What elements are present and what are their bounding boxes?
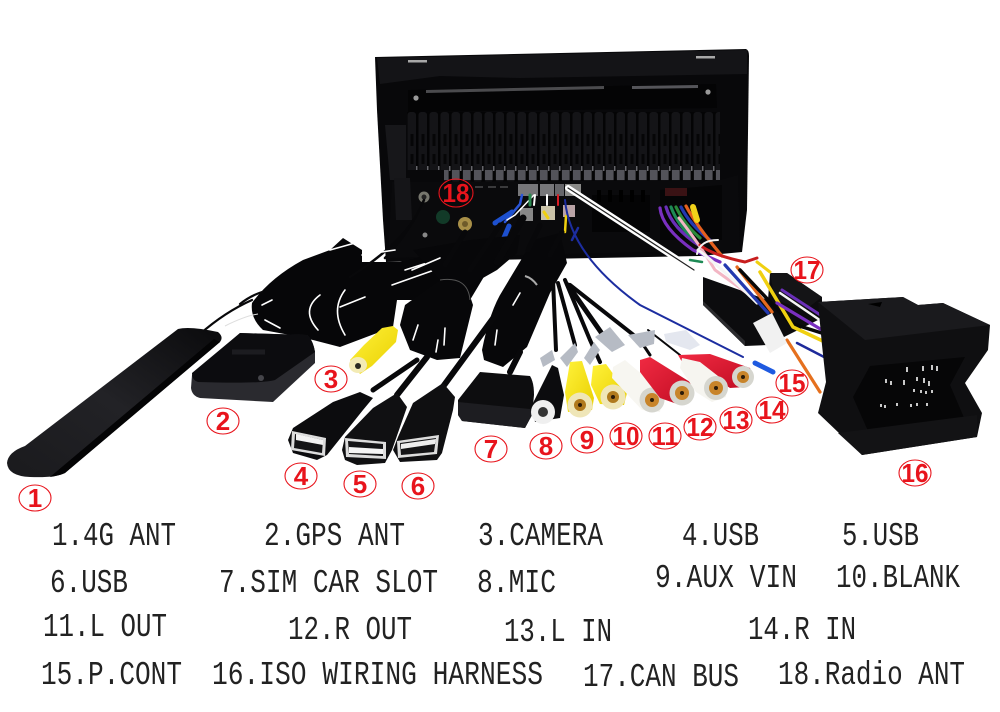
legend row 2: 8.MIC xyxy=(477,565,556,602)
callout 10: 10 xyxy=(612,421,640,451)
head unit rear panel xyxy=(375,49,749,262)
callout 14: 14 xyxy=(758,395,786,425)
callout 13: 13 xyxy=(722,405,750,435)
component 12: red RCA xyxy=(640,357,694,406)
callout 7: 7 xyxy=(484,434,498,464)
legend row 2: 6.USB xyxy=(50,565,128,602)
RCA cable tags xyxy=(540,327,700,367)
legend row 2 xyxy=(50,560,960,602)
wire label tag xyxy=(753,313,787,353)
legend row 2: 10.BLANK xyxy=(836,560,960,597)
callout 16: 16 xyxy=(902,458,928,488)
callout 6 xyxy=(402,471,434,501)
component 6: USB socket xyxy=(393,383,455,462)
component 3: camera RCA connector xyxy=(349,326,398,374)
USB branch cables xyxy=(373,313,520,395)
component 14: red RCA xyxy=(678,354,754,388)
component 9: yellow RCA xyxy=(565,361,594,418)
callout 5 xyxy=(344,469,376,499)
callout 3: 3 xyxy=(324,364,338,394)
legend row 3: 12.R OUT xyxy=(288,612,412,649)
callout 15: 15 xyxy=(778,368,806,398)
legend row 2: 7.SIM CAR SLOT xyxy=(219,565,438,602)
double white lead xyxy=(568,188,694,270)
callout 11: 11 xyxy=(652,421,678,451)
component 13: white RCA xyxy=(680,358,728,402)
callout 12: 12 xyxy=(686,412,714,442)
callout 9: 9 xyxy=(580,425,594,455)
component 4: USB socket xyxy=(288,392,373,460)
legend row 4: 16.ISO WIRING HARNESS xyxy=(212,657,543,694)
right RCA cable coil xyxy=(470,225,567,367)
component 5: USB socket xyxy=(342,393,407,465)
left antenna coil xyxy=(200,200,497,352)
component 8: mic socket xyxy=(531,365,564,424)
colour lead wires at connector xyxy=(505,195,743,357)
legend row 3: 14.R IN xyxy=(748,612,856,649)
callout 6: 6 xyxy=(411,471,425,501)
component 1: 4G antenna xyxy=(7,328,222,477)
callout 3 xyxy=(315,364,347,394)
callout 2 xyxy=(207,406,239,436)
cable highlights xyxy=(262,243,440,352)
callout 18: 18 xyxy=(442,178,470,208)
callout 8 xyxy=(530,431,562,461)
callout 4 xyxy=(285,461,317,491)
legend row 3 xyxy=(43,609,856,651)
legend row 1 xyxy=(52,518,919,555)
legend row 1: 4.USB xyxy=(682,518,759,555)
component 16: ISO wiring harness xyxy=(818,297,990,455)
legend row 1: 3.CAMERA xyxy=(478,518,603,555)
legend row 4: 15.P.CONT xyxy=(41,657,182,694)
legend row 1: 2.GPS ANT xyxy=(264,518,405,555)
callout 1: 1 xyxy=(28,483,42,513)
callout 1 xyxy=(19,483,51,513)
component 11: white RCA xyxy=(612,360,664,412)
component 7: SIM card slot xyxy=(458,372,534,428)
legend row 4 xyxy=(41,657,965,696)
antenna sockets xyxy=(418,192,472,238)
heat sink fins xyxy=(407,112,720,182)
callout 5: 5 xyxy=(353,469,367,499)
legend row 1: 5.USB xyxy=(842,518,919,555)
legend row 4: 17.CAN BUS xyxy=(583,659,739,696)
legend row 2: 9.AUX VIN xyxy=(655,560,797,597)
callout 9 xyxy=(571,425,603,455)
component 15: blue power control lead xyxy=(755,363,773,372)
legend row 3: 13.L IN xyxy=(504,614,612,651)
component 2: GPS antenna xyxy=(191,333,315,402)
centre USB cable coil xyxy=(400,218,523,360)
legend row 3: 11.L OUT xyxy=(43,609,167,646)
legend row 1: 1.4G ANT xyxy=(52,518,176,555)
component 17: CAN bus box xyxy=(703,273,822,346)
lower bay xyxy=(388,175,740,258)
component 10: yellow RCA xyxy=(591,364,627,410)
callout 17: 17 xyxy=(794,255,820,285)
callout 4: 4 xyxy=(294,461,309,491)
slot panel xyxy=(408,84,717,112)
connector block xyxy=(518,184,581,221)
callout 8: 8 xyxy=(539,431,553,461)
legend xyxy=(41,518,965,696)
blue connector clips xyxy=(495,212,512,240)
callout 2: 2 xyxy=(216,406,230,436)
wiring loom xyxy=(660,206,830,392)
callout 7 xyxy=(475,434,507,464)
RCA branch cables xyxy=(553,280,680,362)
